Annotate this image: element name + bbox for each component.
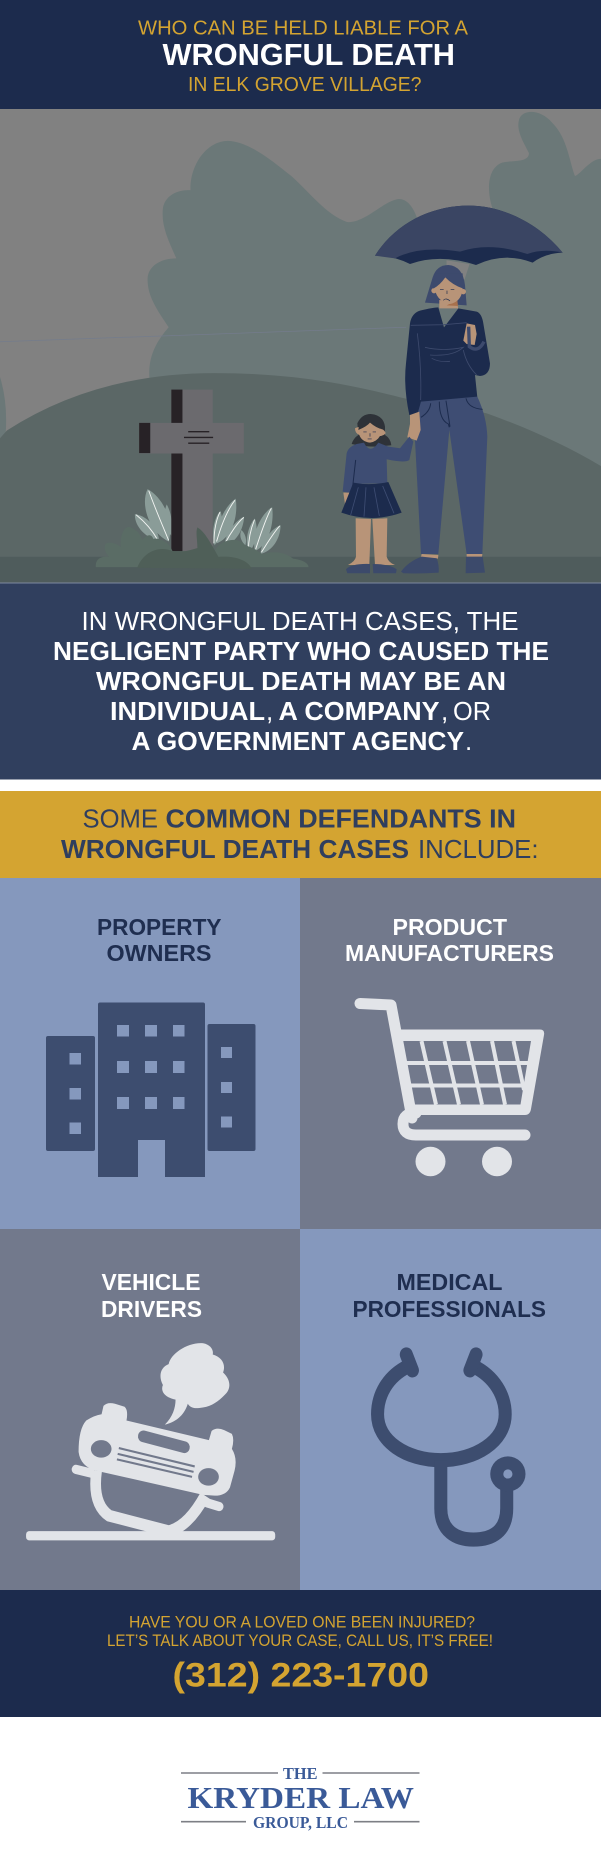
cross — [139, 390, 244, 554]
label: property owners — [97, 914, 222, 966]
white line under illustration — [0, 582, 601, 584]
panel: common defendants heading — [0, 791, 601, 878]
explanation text: A COMPANY — [278, 696, 440, 726]
bushes — [96, 527, 309, 569]
icon: overturned car — [26, 1343, 275, 1540]
explanation text: NEGLIGENT PARTY WHO CAUSED THE — [53, 636, 549, 666]
panel: call to action — [0, 1590, 601, 1717]
gravestone cross with plants — [96, 390, 309, 569]
label: vehicle drivers — [101, 1269, 202, 1322]
title: IN ELK GROVE VILLAGE? — [188, 74, 422, 96]
umbrella — [375, 206, 563, 265]
label: vehicle drivers: DRIVERS — [101, 1296, 202, 1322]
child — [341, 414, 413, 573]
explanation text: , — [441, 696, 448, 726]
title — [138, 18, 469, 96]
scene background — [0, 112, 601, 582]
heading text — [61, 804, 538, 864]
phone number: (312) 223-1700 — [172, 1656, 429, 1694]
panel: product manufacturers — [300, 878, 601, 1229]
panel: medical professionals — [300, 1229, 601, 1590]
call to action text — [107, 1614, 493, 1650]
header panel — [0, 0, 601, 109]
label: property owners: OWNERS — [106, 940, 212, 966]
label: product manufacturers: PRODUCT — [392, 914, 507, 940]
explanation text — [53, 606, 549, 756]
icon: stethoscope — [378, 1354, 526, 1540]
explanation text: A GOVERNMENT AGENCY — [132, 726, 464, 756]
panel: vehicle drivers — [0, 1229, 300, 1590]
heading text: COMMON DEFENDANTS IN — [166, 804, 516, 834]
panel: property owners — [0, 878, 300, 1229]
icon: shopping cart — [360, 1004, 544, 1176]
explanation text: INDIVIDUAL — [110, 696, 265, 726]
label: product manufacturers — [345, 914, 554, 966]
explanation text: . — [465, 726, 472, 756]
title: WHO CAN BE HELD LIABLE FOR A — [138, 18, 469, 40]
panel: wrongful death explanation — [0, 584, 601, 780]
call to action text: HAVE YOU OR A LOVED ONE BEEN INJURED? — [129, 1614, 475, 1632]
figures: woman with umbrella and child — [341, 206, 563, 574]
logo: The Kryder Law Group, LLC: GROUP, LLC — [253, 1813, 348, 1832]
heading text: WRONGFUL DEATH CASES — [61, 834, 409, 864]
label: medical professionals: PROFESSIONALS — [352, 1296, 546, 1322]
label: medical professionals — [352, 1269, 546, 1322]
heading text: INCLUDE: — [418, 834, 538, 864]
title: WRONGFUL DEATH — [162, 38, 455, 72]
logo: The Kryder Law Group, LLC: KRYDER LAW — [188, 1780, 414, 1815]
label: medical professionals: MEDICAL — [396, 1269, 502, 1295]
heading text: SOME — [82, 804, 158, 834]
label: product manufacturers: MANUFACTURERS — [345, 940, 554, 966]
call to action text: LET’S TALK ABOUT YOUR CASE, CALL US, IT’S FREE! — [107, 1632, 493, 1650]
logo: The Kryder Law Group, LLC — [181, 1764, 420, 1832]
icon: buildings — [46, 1002, 256, 1177]
woman — [401, 265, 490, 574]
explanation text: , — [266, 696, 273, 726]
illustration: mother and child at grave — [0, 109, 601, 584]
explanation text: IN WRONGFUL DEATH CASES, THE — [82, 606, 518, 636]
plants behind cross — [135, 489, 281, 554]
explanation text: WRONGFUL DEATH MAY BE AN — [96, 666, 506, 696]
label: vehicle drivers: VEHICLE — [102, 1269, 200, 1295]
label: property owners: PROPERTY — [97, 914, 222, 940]
explanation text: OR — [453, 696, 491, 726]
logo: The Kryder Law Group, LLC: THE — [283, 1764, 318, 1783]
